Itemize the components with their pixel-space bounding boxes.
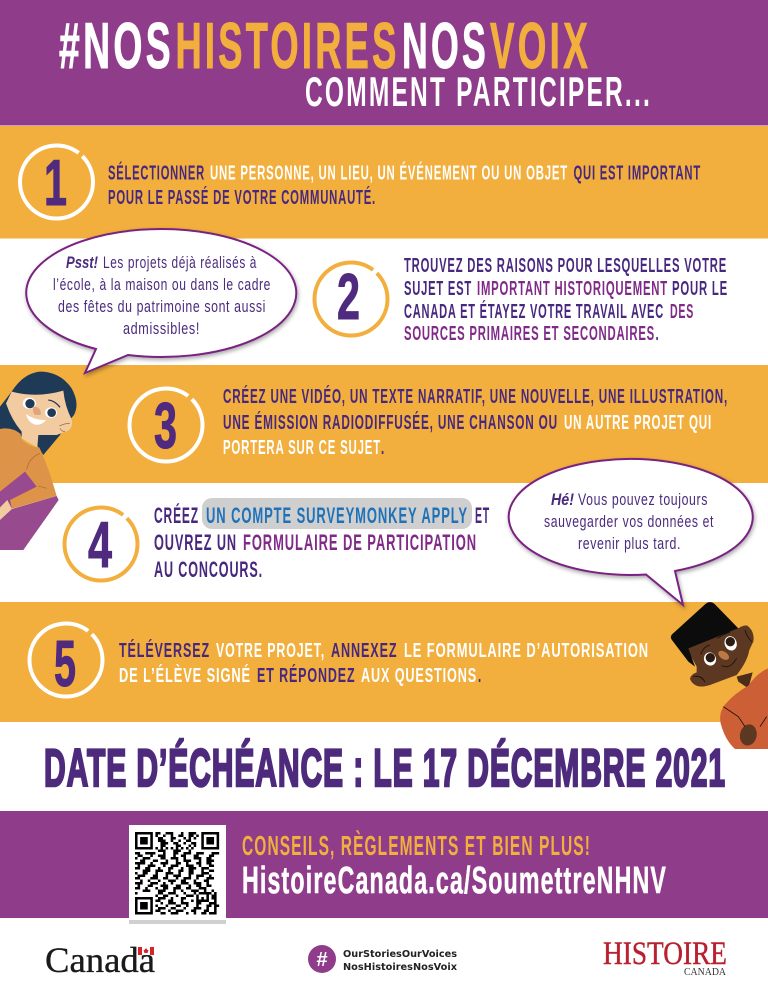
step 4 text: FORMULAIRE DE PARTICIPATION: [243, 530, 477, 555]
band: step 1: [0, 126, 768, 238]
speech bubble: Psst: Les projets déjà réalisés à: [103, 253, 257, 272]
number badge 1: 1: [44, 146, 67, 219]
step 1 text: [108, 162, 701, 209]
header band: [0, 0, 768, 126]
step 4 text: UN COMPTE SURVEYMONKEY APPLY: [206, 503, 468, 528]
step 1: [5, 130, 701, 234]
footer band: [0, 811, 768, 918]
number badge 5: [14, 608, 118, 712]
title: hashtag: NOS: [402, 9, 489, 82]
speech bubble: Psst: Psst!: [66, 253, 98, 272]
title: hashtag: HISTOIRES: [176, 9, 400, 82]
number badge 4: [49, 492, 153, 596]
illustration: boy character: [671, 602, 768, 749]
speech bubble: Hé: revenir plus tard.: [578, 534, 681, 553]
band: step 3: [0, 365, 768, 483]
speech bubble: Psst: admissibles!: [123, 319, 200, 338]
step 2 text: [404, 255, 728, 345]
step 4 text: CRÉEZ: [154, 503, 199, 528]
step 3 text: [223, 385, 728, 459]
speech bubble: Psst: [26, 229, 296, 373]
speech bubble: Hé: [509, 459, 753, 605]
step 1 text: SÉLECTIONNER: [108, 162, 205, 184]
step 5 text: .: [478, 665, 482, 687]
logo: Canada wordmark: Canada: [45, 940, 155, 980]
step 5: [14, 608, 649, 712]
step 5 text: VOTRE PROJET,: [216, 640, 325, 662]
number badge 3: 3: [154, 389, 177, 462]
step 2: [299, 247, 728, 351]
step 4 text: OUVREZ UN: [154, 530, 237, 555]
number badge 5: 5: [54, 627, 76, 700]
footer text: [242, 830, 667, 902]
illustration: girl character: [0, 372, 77, 550]
speech bubble: Hé: Hé!: [551, 490, 574, 509]
title: hashtag: VOIX: [490, 9, 591, 82]
QR modules: [135, 832, 219, 914]
step 2 text: POUR LE: [672, 278, 728, 300]
title: hashtag: #NOS: [59, 9, 174, 82]
number badge 4: 4: [88, 508, 112, 581]
QR code card: [129, 825, 226, 924]
step 5 text: ET RÉPONDEZ: [257, 664, 356, 687]
speech bubble: Psst: des fêtes du patrimoine sont aussi: [58, 297, 266, 316]
link highlight pill: [202, 498, 472, 529]
step 5 text: DE L’ÉLÈVE SIGNÉ: [119, 664, 251, 687]
step 3 text: .: [381, 437, 385, 459]
step 3: [114, 373, 728, 477]
text: ET: [475, 503, 490, 528]
logo: Histoire Canada: HISTOIRE: [603, 936, 727, 972]
step 1 text: POUR LE PASSÉ DE VOTRE COMMUNAUTÉ.: [108, 186, 376, 209]
logo: Histoire Canada: CANADA: [684, 967, 726, 978]
step 5 text: TÉLÉVERSEZ: [119, 639, 210, 662]
step 4 text: [154, 498, 490, 582]
step 5 text: AUX QUESTIONS: [361, 665, 477, 687]
step 5 text: [119, 639, 649, 687]
number badge 2: 2: [337, 260, 360, 333]
step 2 text: .: [656, 323, 660, 345]
band: step 5: [0, 602, 768, 722]
number badge 1: [5, 130, 108, 234]
speech bubble: Hé: Vous pouvez toujours: [578, 490, 708, 509]
logo: hashtag campaign: #: [316, 949, 328, 971]
number badge 2: [299, 247, 403, 351]
logo: hashtag campaign: OurStoriesOurVoices: [343, 949, 457, 960]
number badge 3: [114, 373, 218, 477]
step 3 text: PORTERA SUR CE SUJET: [223, 437, 381, 459]
logo: hashtag campaign: NosHistoiresNosVoix: [343, 962, 458, 973]
step 4 text: AU CONCOURS.: [154, 557, 263, 582]
step 5 text: ANNEXEZ: [331, 640, 398, 662]
speech bubble: Psst: l’école, à la maison ou dans le cadre: [53, 275, 271, 294]
step 2 text: SUJET EST: [404, 278, 472, 300]
step 4: [49, 492, 490, 596]
icon: Canadian flag: [138, 947, 154, 955]
logo: hashtag campaign: [308, 945, 458, 973]
step 2 text: DES: [670, 301, 694, 323]
